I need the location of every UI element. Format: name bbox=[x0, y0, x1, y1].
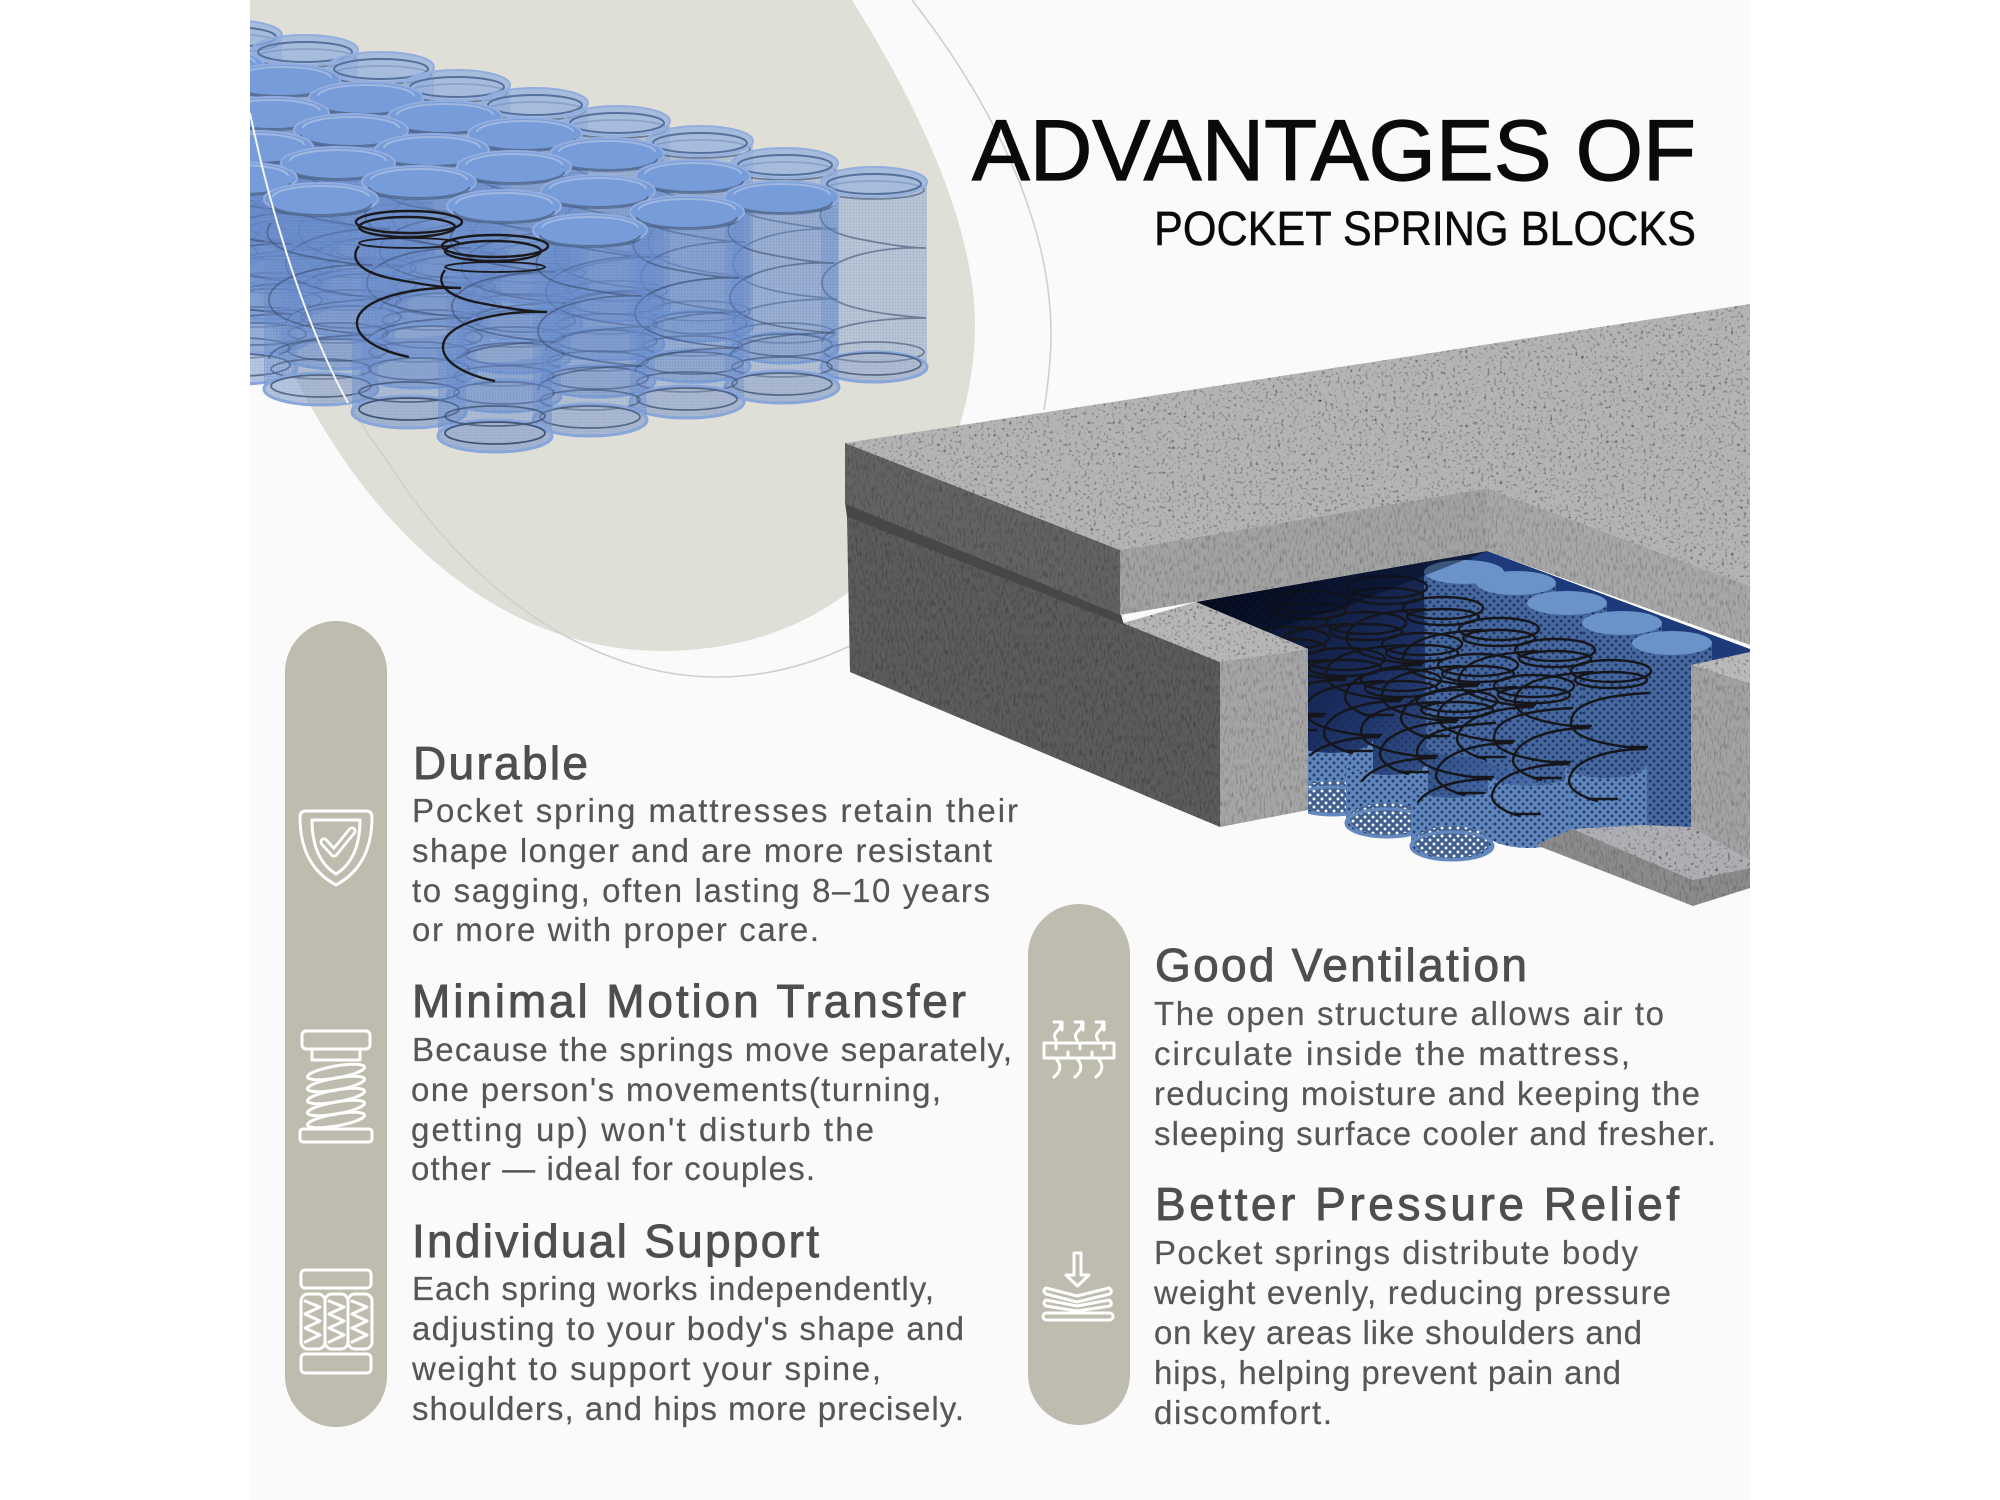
text block: Individual Support bbox=[411, 1215, 964, 1427]
text block: Durable: Durable bbox=[413, 737, 588, 789]
text block: Better Pressure Relief bbox=[1153, 1178, 1679, 1431]
icon: shield with check bbox=[300, 811, 372, 885]
text block: Good Ventilation: The open structure allows air to bbox=[1154, 995, 1664, 1032]
text block: Individual Support: adjusting to your body's shape and bbox=[412, 1310, 964, 1347]
title bbox=[972, 103, 1696, 256]
mattress cutaway illustration bbox=[845, 304, 1760, 906]
text block: Good Ventilation: sleeping surface cooler and fresher. bbox=[1154, 1115, 1716, 1152]
text block: Minimal Motion Transfer: getting up) won't disturb the bbox=[411, 1111, 874, 1148]
white arc over springs bbox=[250, 113, 348, 403]
text block: Good Ventilation: Good Ventilation bbox=[1155, 939, 1527, 991]
page background panel bbox=[250, 0, 1750, 1500]
icon: ventilation bbox=[1044, 1022, 1114, 1077]
text block: Better Pressure Relief: Pocket springs distribute body bbox=[1154, 1234, 1638, 1271]
text block: Individual Support: shoulders, and hips more precisely. bbox=[412, 1390, 964, 1427]
text block: Durable bbox=[412, 737, 1018, 948]
text block: Better Pressure Relief: Better Pressure Relief bbox=[1155, 1178, 1679, 1230]
text block: Better Pressure Relief: on key areas like shoulders and bbox=[1154, 1314, 1642, 1351]
text block: Durable: shape longer and are more resistant bbox=[412, 832, 992, 869]
text block: Individual Support: weight to support your spine, bbox=[411, 1350, 881, 1387]
right icon pill bbox=[1028, 904, 1130, 1425]
left icon pill bbox=[285, 621, 387, 1427]
text block: Better Pressure Relief: weight evenly, reducing pressure bbox=[1153, 1274, 1671, 1311]
icon: spring bbox=[300, 1031, 372, 1142]
right foam block and floor bbox=[1536, 652, 1750, 906]
text block: Minimal Motion Transfer: Minimal Motion Transfer bbox=[412, 975, 966, 1027]
text block: Durable: Pocket spring mattresses retain their bbox=[412, 792, 1018, 829]
top foam slab bbox=[845, 304, 1750, 645]
thin decorative arc outline bbox=[348, 0, 1051, 677]
text block: Good Ventilation: circulate inside the mattress, bbox=[1154, 1035, 1630, 1072]
text block: Better Pressure Relief: hips, helping prevent pain and bbox=[1154, 1354, 1621, 1391]
beige blob backdrop bbox=[250, 0, 975, 651]
text block: Individual Support: Individual Support bbox=[412, 1215, 819, 1267]
exposed interior with pocket springs bbox=[1190, 545, 1760, 875]
text block: Minimal Motion Transfer: Because the springs move separately, bbox=[412, 1031, 1012, 1068]
icon: pressure relief bbox=[1043, 1253, 1113, 1320]
text block: Better Pressure Relief: discomfort. bbox=[1154, 1394, 1332, 1431]
text block: Good Ventilation bbox=[1154, 939, 1716, 1152]
text block: Individual Support: Each spring works independently, bbox=[412, 1270, 934, 1307]
title: ADVANTAGES OF bbox=[972, 103, 1696, 199]
title: POCKET SPRING BLOCKS bbox=[1154, 203, 1696, 256]
icon: spring layers bbox=[301, 1270, 372, 1373]
text block: Minimal Motion Transfer: other — ideal for couples. bbox=[411, 1150, 815, 1187]
text block: Minimal Motion Transfer bbox=[411, 975, 1012, 1187]
lower foam block bbox=[847, 517, 1308, 827]
text block: Minimal Motion Transfer: one person's movements(turning, bbox=[411, 1071, 941, 1108]
pocket spring block illustration bbox=[250, 20, 928, 454]
text block: Durable: or more with proper care. bbox=[412, 911, 819, 948]
text block: Good Ventilation: reducing moisture and keeping the bbox=[1154, 1075, 1700, 1112]
text block: Durable: to sagging, often lasting 8–10 years bbox=[412, 872, 990, 909]
